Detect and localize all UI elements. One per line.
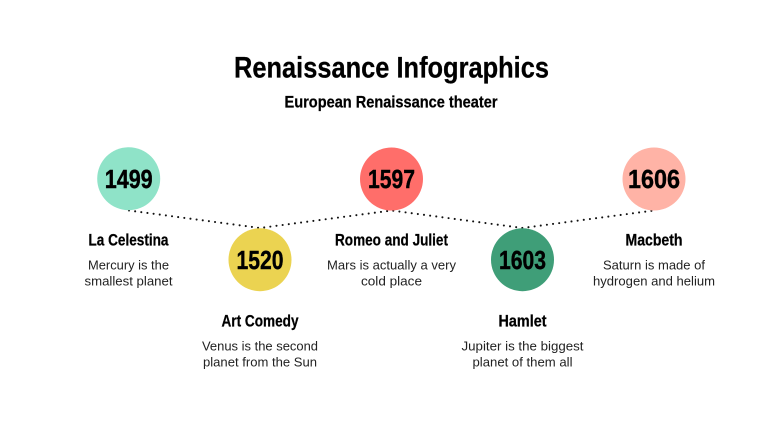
milestone: 1520 Art Comedy xyxy=(202,228,318,370)
milestone: 1597 Romeo and Juliet: Mars is actually a very xyxy=(327,258,456,272)
milestone: 1499 La Celestina xyxy=(84,147,173,288)
milestone: 1606 Macbeth xyxy=(593,148,715,288)
milestone: 1597 Romeo and Juliet xyxy=(327,148,456,288)
milestone: 1597 Romeo and Juliet: Romeo and Juliet xyxy=(335,232,448,250)
milestone: 1606 Macbeth: Saturn is made of xyxy=(603,258,705,272)
milestone: 1603 Hamlet: Jupiter is the biggest xyxy=(462,338,584,354)
milestone: 1606 Macbeth: hydrogen and helium xyxy=(593,274,715,288)
milestone: 1499 La Celestina: Mercury is the xyxy=(88,258,169,272)
milestone: 1499 La Celestina: La Celestina xyxy=(88,232,169,250)
milestone: 1520 Art Comedy: Art Comedy xyxy=(222,312,299,330)
dotted timeline connector xyxy=(129,210,654,228)
milestone: 1520 Art Comedy: 1520 xyxy=(236,245,284,275)
subtitle: European Renaissance theater xyxy=(284,92,498,112)
milestone: 1606 Macbeth: Macbeth xyxy=(626,232,682,250)
milestone: 1499 La Celestina: 1499 xyxy=(105,164,153,194)
milestone: 1603 Hamlet: 1603 xyxy=(499,245,546,275)
milestone: 1597 Romeo and Juliet: 1597 xyxy=(368,164,415,194)
milestone: 1603 Hamlet: planet of them all xyxy=(472,354,573,370)
milestone: 1499 La Celestina: smallest planet xyxy=(84,274,173,288)
milestone: 1597 Romeo and Juliet: cold place xyxy=(361,274,422,288)
title: Renaissance Infographics xyxy=(234,52,549,84)
milestone: 1520 Art Comedy: Venus is the second xyxy=(202,338,318,354)
milestone: 1603 Hamlet xyxy=(462,228,584,370)
milestone: 1520 Art Comedy: planet from the Sun xyxy=(203,354,317,370)
milestone: 1606 Macbeth: 1606 xyxy=(628,164,680,194)
milestone: 1603 Hamlet: Hamlet xyxy=(498,312,547,330)
